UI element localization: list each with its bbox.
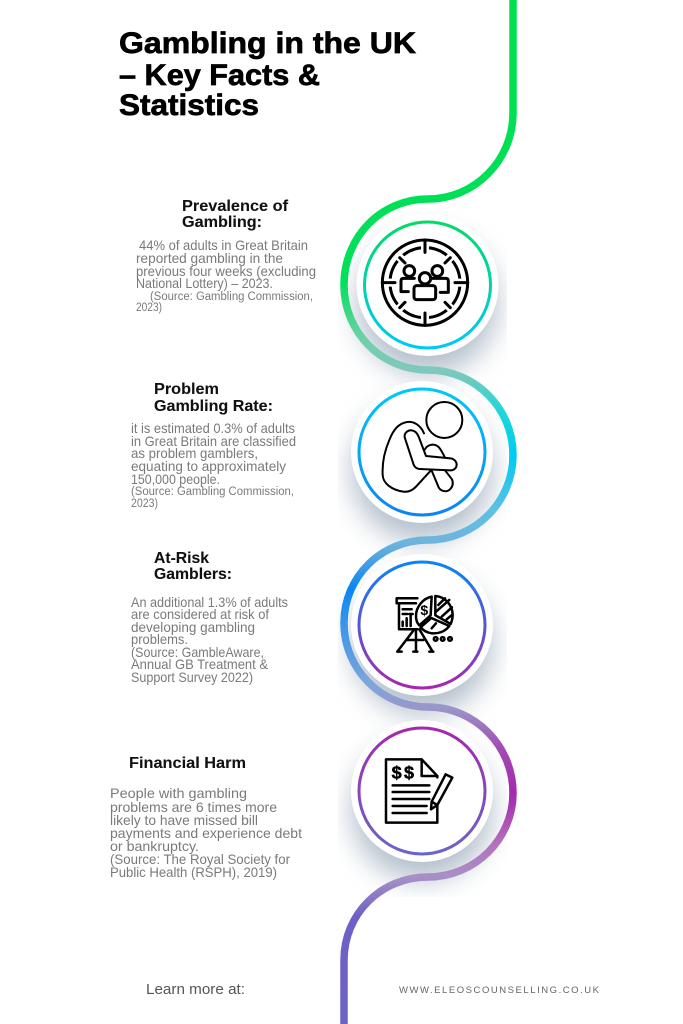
heading: problem gambling rate: Problem (154, 381, 219, 398)
text block: prevalence: (Source: Gambling Commission, (150, 291, 313, 303)
icon disc 1: target with people (356, 214, 498, 356)
text block: at-risk gamblers (131, 595, 288, 685)
text block: financial harm: Public Health (RSPH), 2019) (110, 865, 277, 880)
text block: problem gambling rate: it is estimated 0.3% of adults (131, 421, 295, 436)
text block: problem gambling rate: as problem gamblers, (131, 446, 258, 461)
panel: at-risk gamblers (131, 550, 288, 685)
heading: problem gambling rate (154, 381, 273, 415)
text block: at-risk gamblers: problems. (131, 632, 188, 647)
text block: problem gambling rate: equating to approximately (131, 459, 286, 474)
icon: presentation board with pie chart (397, 596, 453, 652)
footer: learn more label: Learn more at: (146, 982, 245, 998)
title: Gambling in the UK (119, 27, 416, 60)
heading: problem gambling rate: Gambling Rate: (154, 398, 273, 415)
heading: prevalence (182, 198, 289, 231)
text block: problem gambling rate (131, 421, 296, 510)
icon: invoice and pencil (386, 759, 452, 823)
heading: at-risk gamblers: At-Risk (154, 550, 209, 567)
text block: prevalence: National Lottery) – 2023. (136, 276, 273, 291)
text block: at-risk gamblers: (Source: GambleAware, (131, 645, 264, 660)
winding timeline line (344, 0, 513, 1024)
text block: financial harm (110, 786, 302, 880)
heading: at-risk gamblers: Gamblers: (154, 566, 232, 583)
footer: website url: WWW.ELEOSCOUNSELLING.CO.UK (399, 985, 600, 996)
panel: problem gambling rate (131, 381, 296, 510)
heading: prevalence: Prevalence of (182, 198, 289, 215)
text block: prevalence: 44% of adults in Great Britain (139, 238, 308, 253)
icon: people in target (382, 240, 468, 325)
icon: presentation board with pie chart: $ (420, 602, 428, 618)
title: – Key Facts & (119, 59, 320, 92)
icon disc 3: presentation and pie chart (351, 554, 493, 696)
text block: problem gambling rate: 2023) (131, 498, 158, 510)
heading: financial harm: Financial Harm (129, 755, 246, 772)
text block: at-risk gamblers: are considered at risk of (131, 607, 269, 622)
heading: at-risk gamblers (154, 550, 232, 583)
text block: prevalence: reported gambling in the (136, 251, 283, 266)
icon disc 2: crouching person (351, 381, 493, 523)
icon: invoice and pencil: $ (392, 763, 402, 783)
text block: at-risk gamblers: An additional 1.3% of adults (131, 595, 288, 610)
icon: invoice and pencil: $ (404, 763, 414, 783)
text block: financial harm: likely to have missed bill (110, 813, 258, 828)
text block: problem gambling rate: 150,000 people. (131, 472, 220, 487)
text block: problem gambling rate: (Source: Gambling Commission, (131, 486, 294, 498)
panel: financial harm (110, 755, 302, 880)
title (119, 27, 416, 122)
title: Statistics (119, 89, 259, 122)
text block: at-risk gamblers: Support Survey 2022) (131, 670, 253, 685)
text block: financial harm: People with gambling (110, 786, 247, 801)
shadows behind icon discs (352, 234, 497, 880)
text block: prevalence: 2023) (136, 302, 162, 314)
icon: crouching person (383, 402, 462, 492)
text block: financial harm: or bankruptcy. (110, 839, 199, 854)
text block: at-risk gamblers: developing gambling (131, 620, 255, 635)
text block: financial harm: (Source: The Royal Society for (110, 852, 290, 867)
text block: financial harm: payments and experience debt (110, 826, 302, 841)
icon disc 4: document with pencil (351, 720, 493, 862)
text block: problem gambling rate: in Great Britain are classified (131, 434, 296, 449)
text block: financial harm: problems are 6 times more (110, 800, 277, 815)
text block: prevalence: previous four weeks (excluding (136, 264, 316, 279)
text block: at-risk gamblers: Annual GB Treatment & (131, 657, 268, 672)
panel: prevalence of gambling (136, 198, 316, 314)
text block: prevalence (136, 238, 316, 314)
heading: prevalence: Gambling: (182, 214, 262, 231)
